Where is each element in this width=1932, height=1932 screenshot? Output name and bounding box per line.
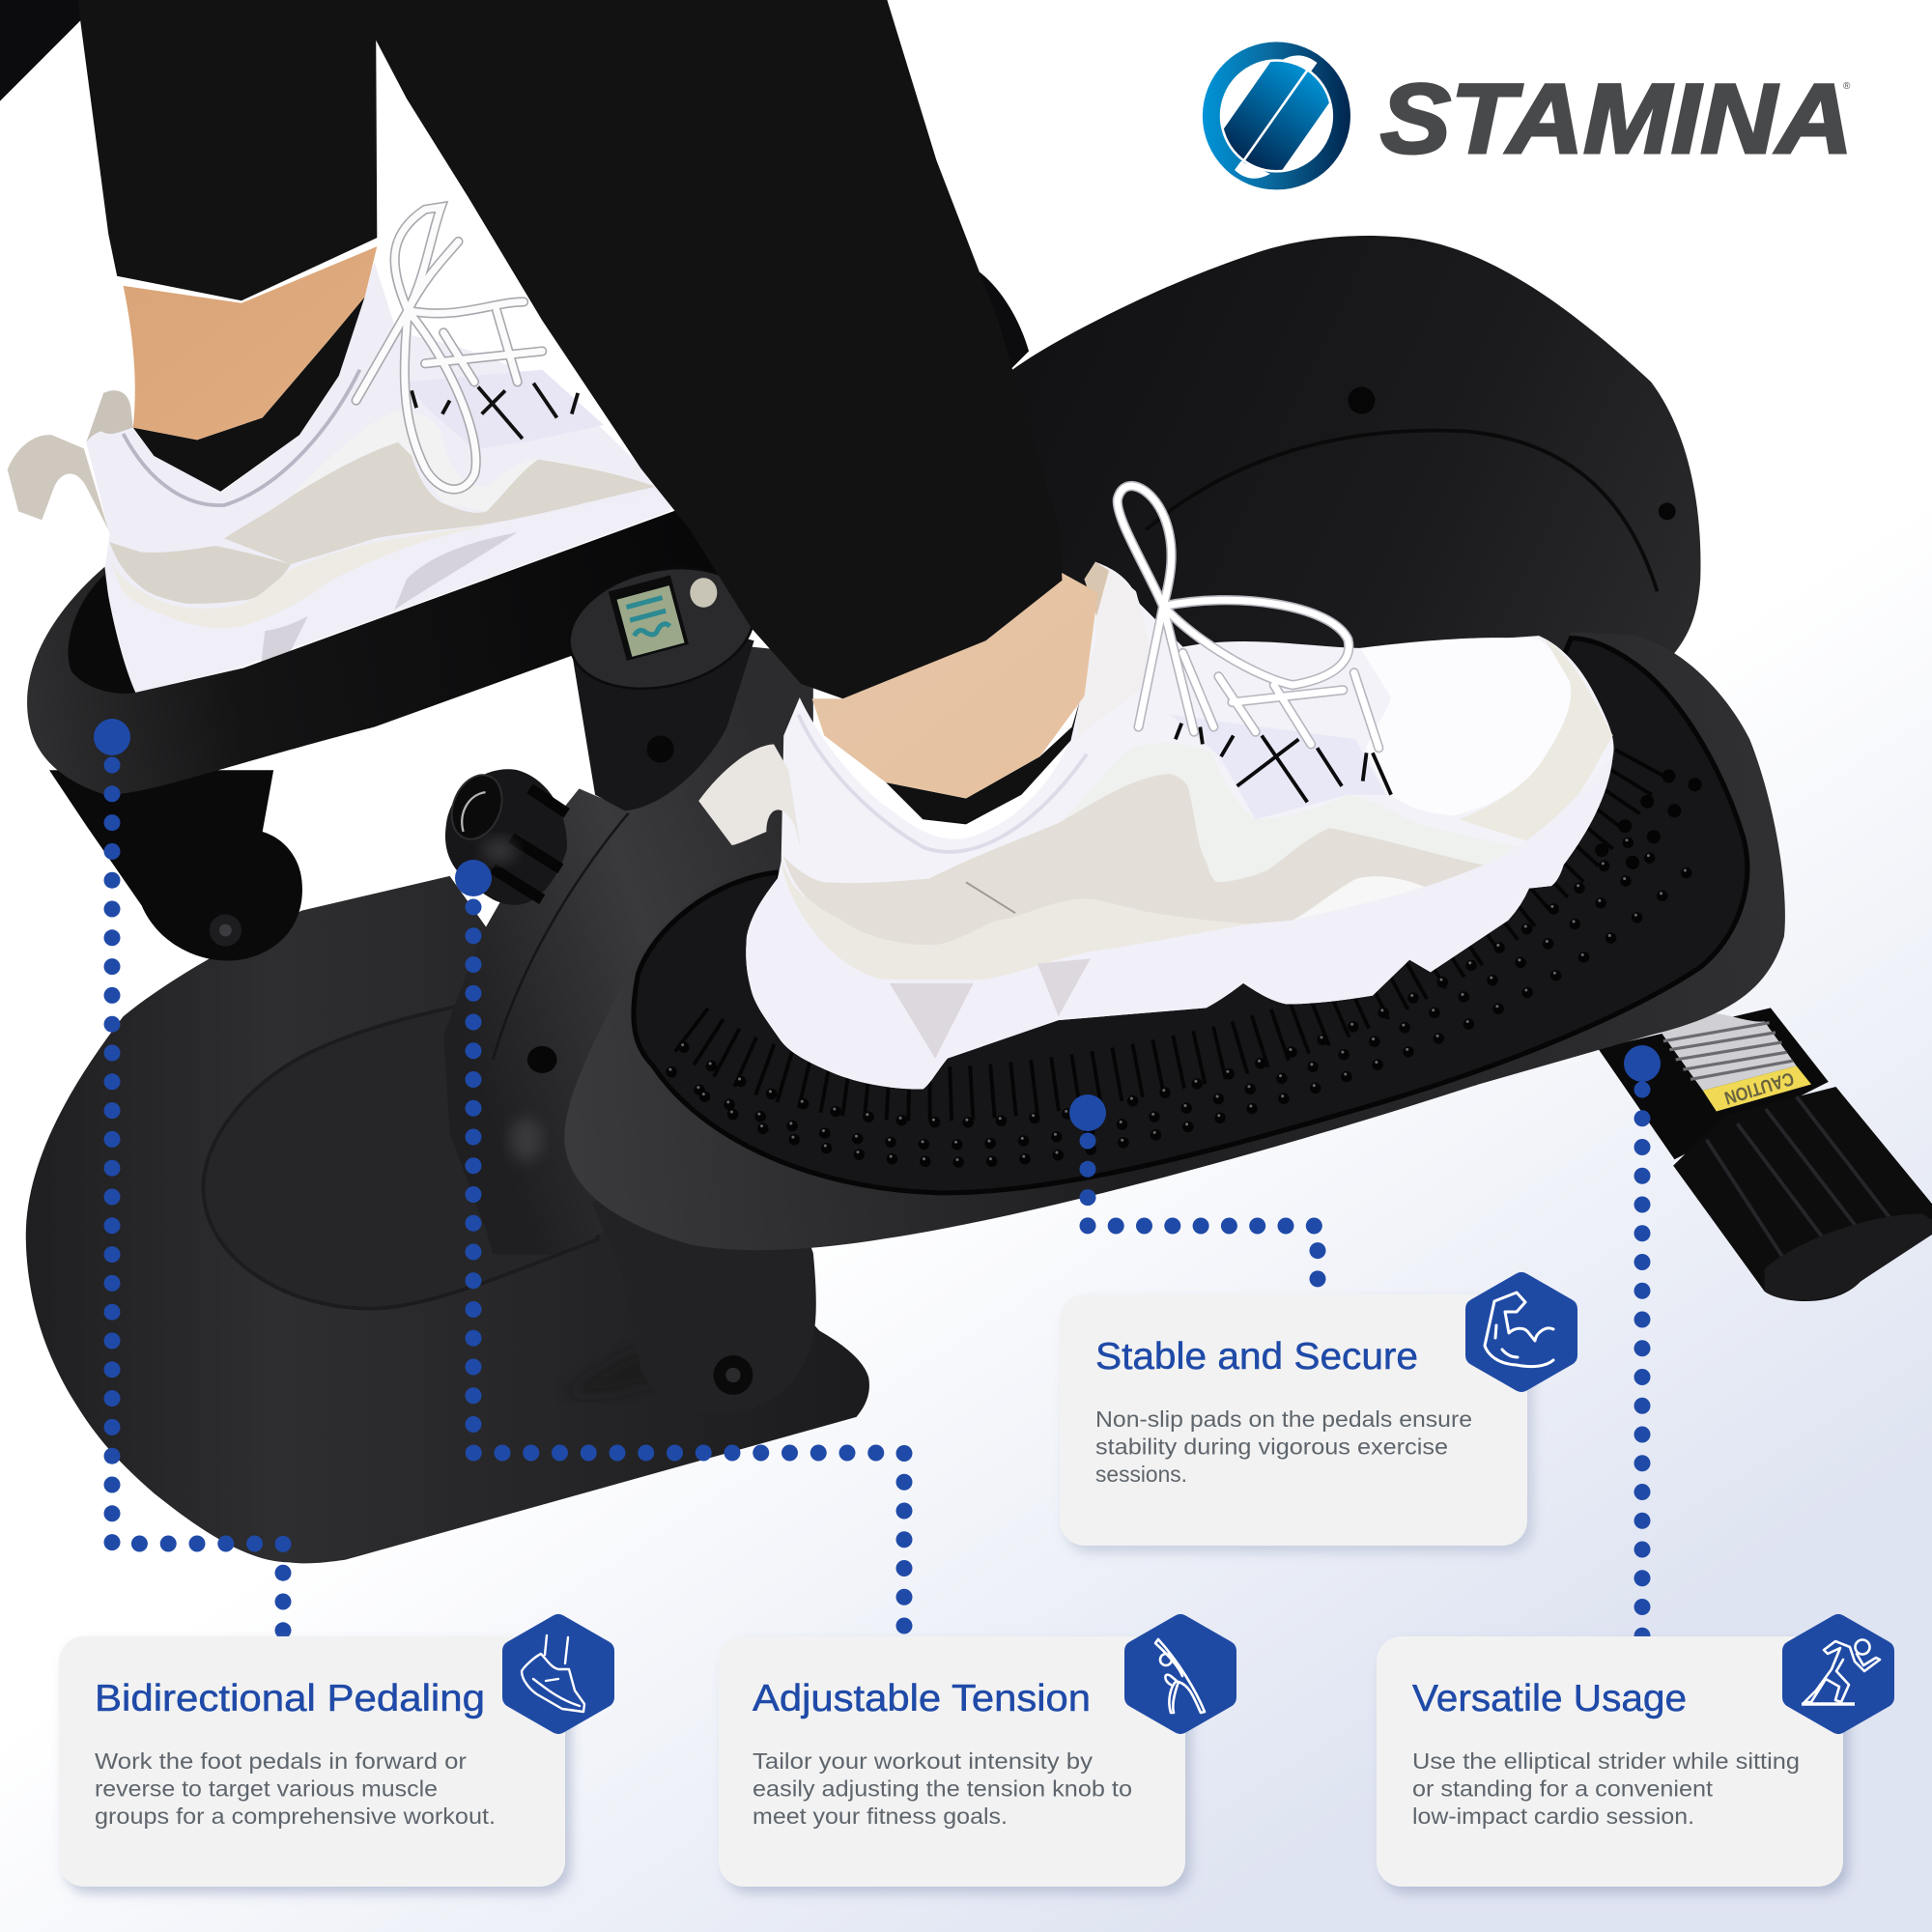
pull tab xyxy=(698,744,801,850)
front legging xyxy=(355,0,1062,698)
shoe silhouette xyxy=(746,562,1614,1090)
description: groups for a comprehensive workout. xyxy=(95,1804,496,1829)
laces xyxy=(1118,486,1378,748)
description xyxy=(95,1748,496,1829)
heading: Versatile Usage xyxy=(1412,1678,1687,1719)
suede seam xyxy=(966,882,1015,913)
laces shadow xyxy=(1118,486,1378,748)
rear shoe laces shadow xyxy=(356,207,542,490)
rear shoe sole fold xyxy=(261,532,518,663)
collar rim xyxy=(799,715,1087,852)
rear shoe panel lines xyxy=(412,384,578,439)
description: easily adjusting the tension knob to xyxy=(753,1776,1132,1801)
rear shoe laces xyxy=(356,207,542,490)
icon: flexed arm xyxy=(1476,1283,1567,1381)
lace panel xyxy=(1171,715,1386,819)
dotted connector: versatile usage xyxy=(1624,1045,1661,1637)
upper-left dark corner xyxy=(0,0,101,101)
ankle skin xyxy=(812,573,1097,799)
icon: sprinter xyxy=(1793,1625,1884,1723)
monitor column with display xyxy=(557,551,766,810)
logo xyxy=(1203,35,1853,197)
description: Non-slip pads on the pedals ensure xyxy=(1095,1406,1472,1432)
warning label xyxy=(1652,1012,1797,1091)
front shoe xyxy=(698,486,1614,1090)
dotted connector: adjustable tension xyxy=(455,860,904,1633)
front pedal xyxy=(564,632,1785,1250)
foot grip xyxy=(1673,1087,1932,1301)
sole notches xyxy=(890,958,1091,1059)
caution word: CAUTION xyxy=(1721,1067,1796,1108)
front pedal bracket xyxy=(591,1182,816,1414)
rear pedal bar xyxy=(27,505,752,795)
glossy overlay xyxy=(1059,743,1526,882)
logo mark xyxy=(1203,35,1350,197)
card: stable and secure xyxy=(1060,1283,1567,1552)
grip end cap xyxy=(1765,1213,1932,1300)
icon: stretching figure xyxy=(1135,1625,1226,1723)
description: low-impact cardio session. xyxy=(1412,1804,1694,1829)
icon: running shoe xyxy=(513,1625,604,1723)
pedal floor xyxy=(634,639,1747,1193)
description: Work the foot pedals in forward or xyxy=(95,1748,467,1774)
cream gloss band xyxy=(781,862,1249,980)
caution sticker xyxy=(1703,1065,1811,1112)
description: stability during vigorous exercise xyxy=(1095,1434,1448,1459)
rear ankle skin xyxy=(124,246,377,440)
description: reverse to target various muscle xyxy=(95,1776,438,1801)
card: versatile usage xyxy=(1377,1625,1884,1893)
mesh toe xyxy=(1360,638,1571,815)
main arch body xyxy=(443,647,813,1254)
white window panel xyxy=(1293,876,1435,921)
rear shoe gloss band xyxy=(110,525,487,629)
tongue xyxy=(1076,562,1152,739)
rear shoe silhouette xyxy=(86,263,675,693)
dotted connector: bidirectional pedaling xyxy=(94,719,283,1633)
flywheel housing xyxy=(949,236,1700,690)
card: bidirectional pedaling xyxy=(59,1625,604,1893)
rear shoe heel collar xyxy=(86,390,133,442)
description xyxy=(753,1748,1132,1829)
rear legging xyxy=(77,0,377,300)
rear shoe lace panel xyxy=(407,370,604,450)
suede panels xyxy=(783,774,1484,945)
card: adjustable tension xyxy=(719,1625,1226,1893)
rear shoe sock xyxy=(133,297,365,492)
panel cross lines xyxy=(1176,724,1391,802)
rear lever with caution label xyxy=(1598,1008,1932,1301)
base plate xyxy=(26,876,869,1563)
description: meet your fitness goals. xyxy=(753,1804,1008,1829)
rear shoe gloss overlay xyxy=(291,411,656,511)
cream toe cap xyxy=(1459,639,1613,842)
logo wordmark: STAMINA xyxy=(1380,64,1853,174)
description xyxy=(1095,1406,1472,1487)
description: Use the elliptical strider while sitting xyxy=(1412,1748,1800,1774)
description: Tailor your workout intensity by xyxy=(753,1748,1093,1774)
dotted connector: stable and secure xyxy=(1069,1094,1318,1285)
heading: Adjustable Tension xyxy=(753,1678,1091,1719)
description: sessions. xyxy=(1095,1462,1187,1487)
rear shoe suede xyxy=(224,442,656,564)
LCD display xyxy=(609,575,689,661)
midsole xyxy=(746,756,1613,1090)
heading: Bidirectional Pedaling xyxy=(95,1678,485,1719)
registered mark: ® xyxy=(1843,81,1851,92)
description xyxy=(1412,1748,1800,1829)
rear heel suede xyxy=(110,542,291,604)
pedal grip bumps xyxy=(671,752,1707,1162)
tension knob xyxy=(442,767,567,905)
heading: Stable and Secure xyxy=(1095,1336,1418,1378)
rear shoe pull tab xyxy=(8,435,108,529)
rear shoe midsole xyxy=(104,493,675,693)
tongue lining xyxy=(1084,562,1109,616)
pedal ridges xyxy=(690,752,1645,1094)
rear foot: legging, ankle, sock, shoe xyxy=(8,0,675,693)
sock xyxy=(886,702,1079,824)
rear shoe collar rim xyxy=(124,370,359,505)
description: or standing for a convenient xyxy=(1412,1776,1713,1801)
rear pedal bracket and wheel xyxy=(49,770,302,960)
bump highlights xyxy=(670,836,1690,1160)
